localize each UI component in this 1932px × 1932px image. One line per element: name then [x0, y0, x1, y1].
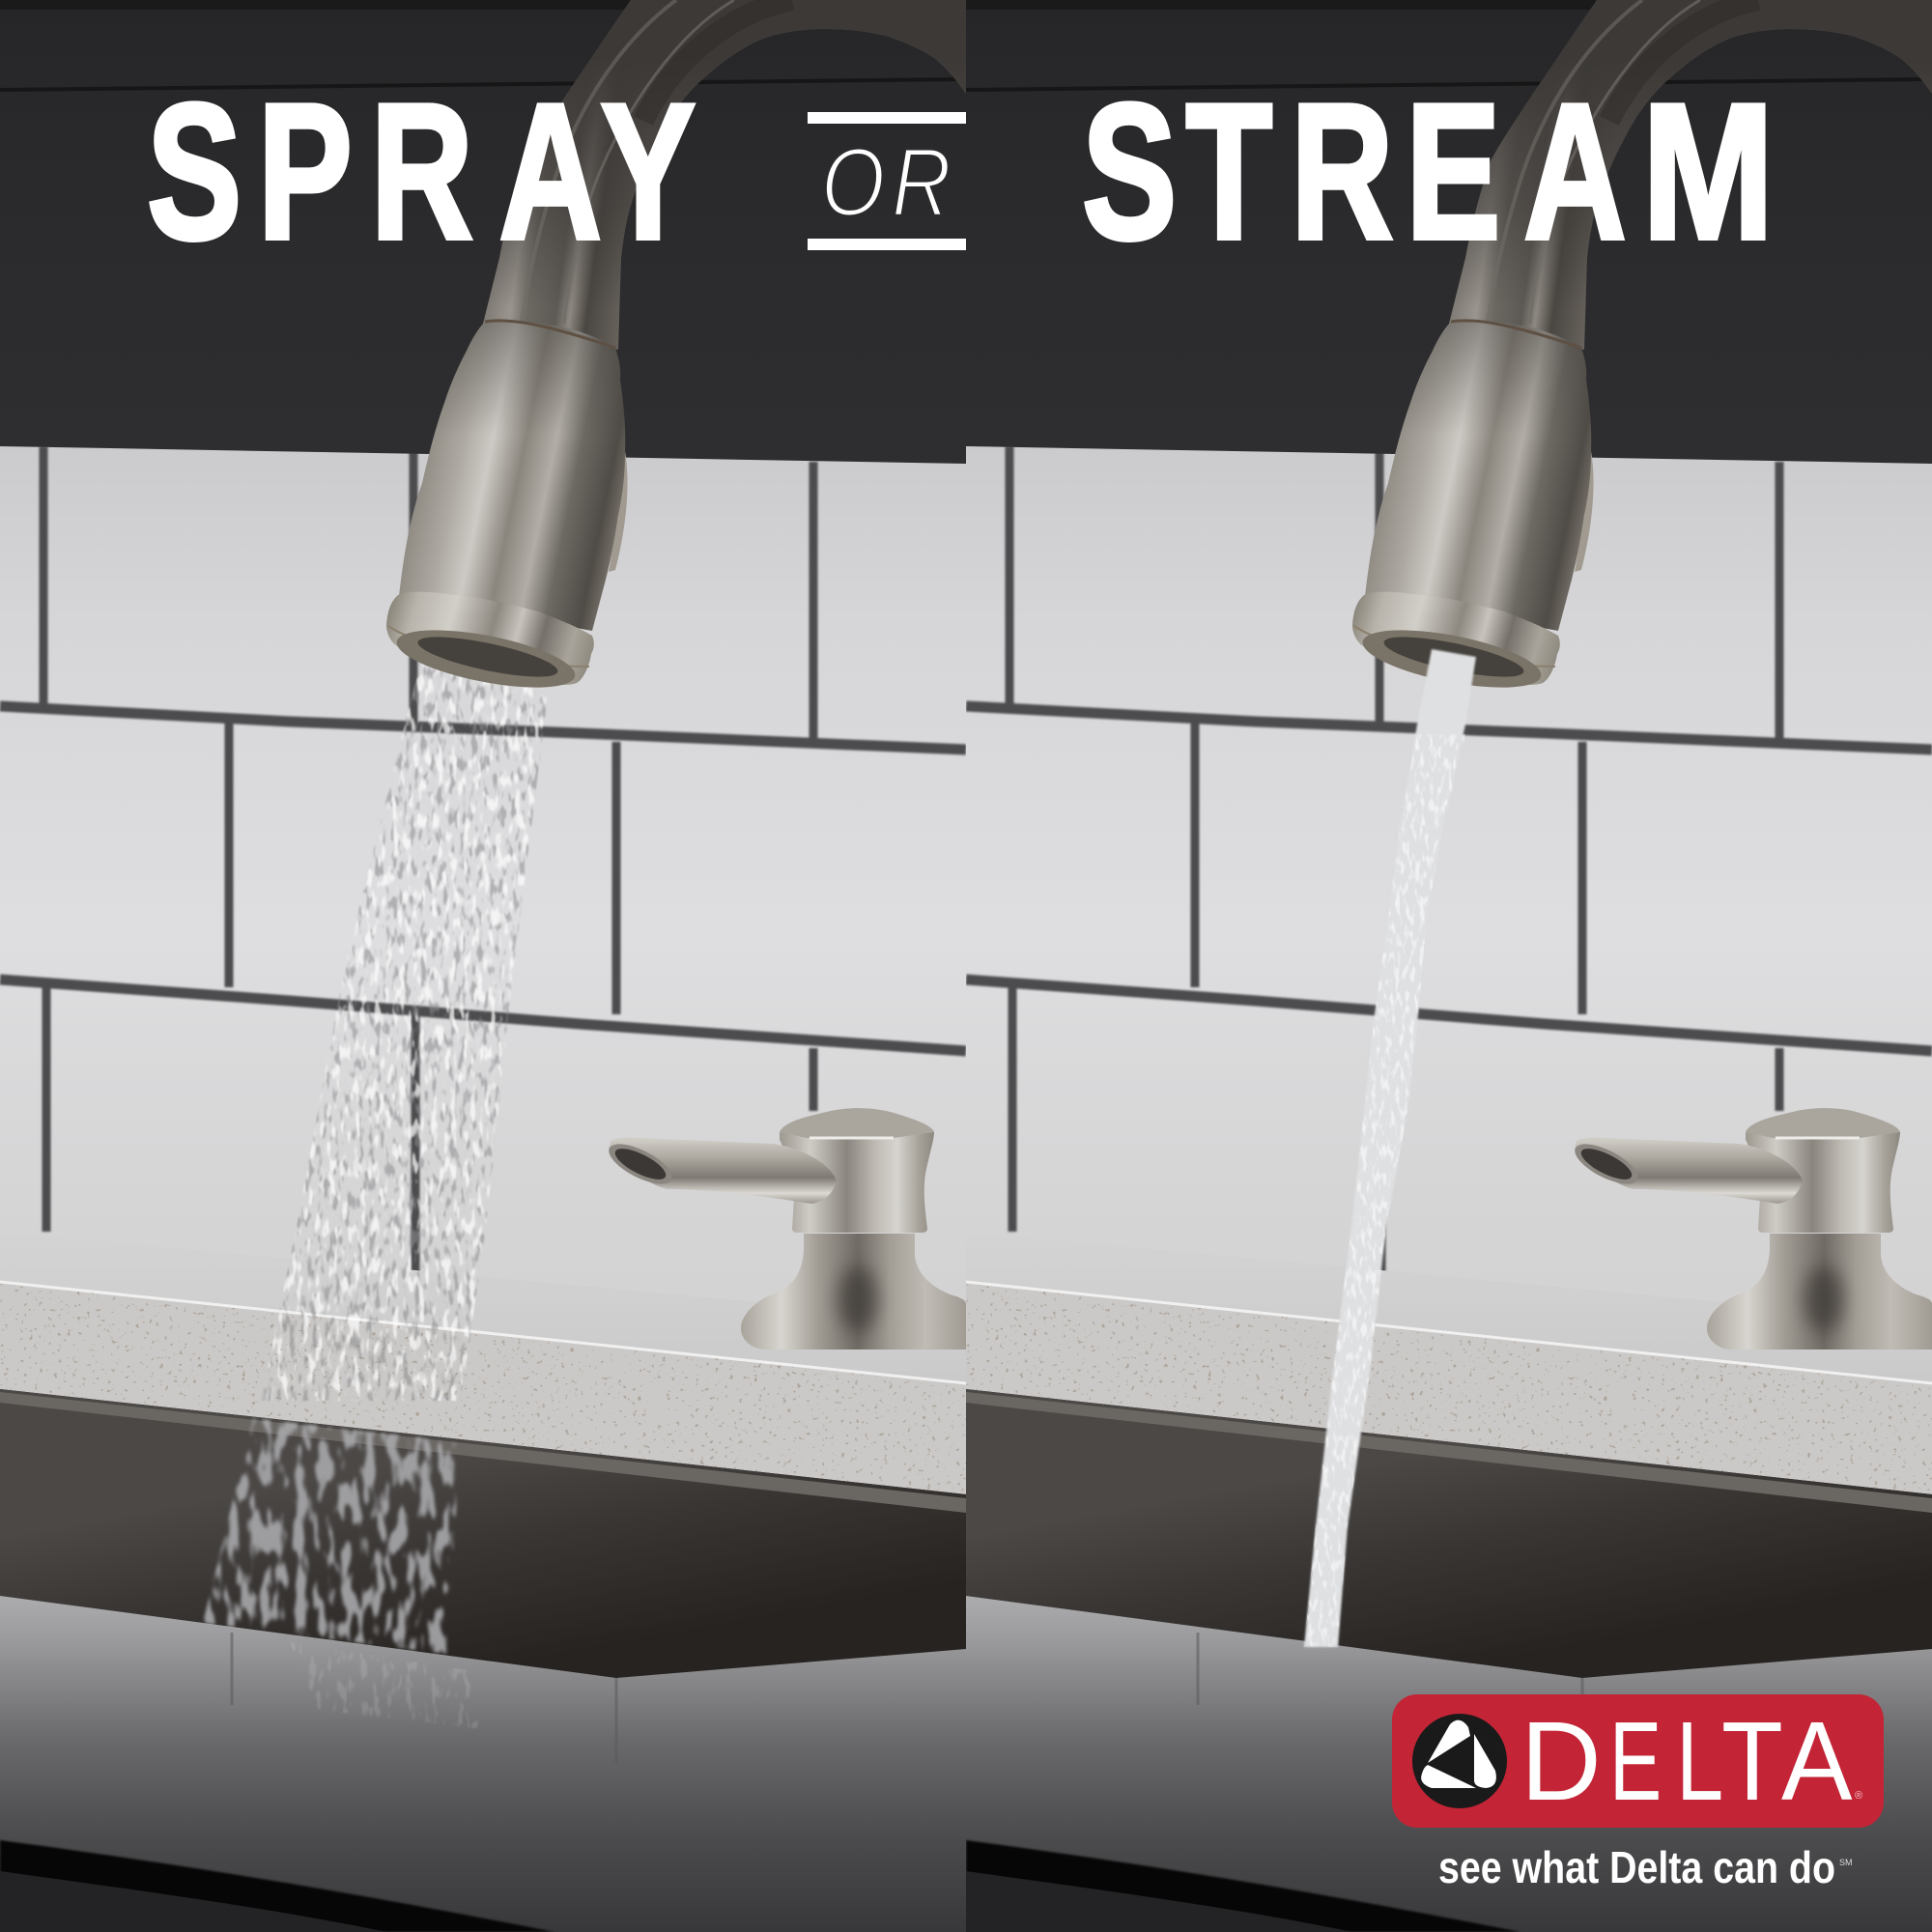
stream of water — [1304, 649, 1476, 1647]
title: SPRAY: SPRAY — [147, 64, 696, 280]
tagline: SM — [1839, 1858, 1853, 1867]
title: STREAM: STREA — [1082, 64, 1626, 280]
backdrop: dark wall, subway tile, counter and sink — [0, 0, 966, 1932]
spray water drops — [203, 642, 553, 1729]
divider: OR — [808, 112, 966, 250]
panel: spray photo — [0, 0, 966, 1932]
wordmark: DELTA: A — [1781, 1698, 1853, 1824]
logo: Delta: ® — [1855, 1790, 1862, 1802]
wordmark: DELTA — [1520, 1698, 1853, 1824]
title: STREAM: M — [1642, 63, 1774, 279]
icon: faucet spray head — [386, 0, 966, 698]
icon: soap dispenser — [1570, 1108, 1932, 1350]
icon: faucet spray head — [1352, 0, 1932, 698]
wordmark: DELTA: T — [1721, 1699, 1783, 1824]
panel: stream photo — [966, 0, 1932, 1932]
wordmark: DELTA: E — [1609, 1699, 1662, 1824]
icon: Delta triangle mark — [1412, 1714, 1507, 1808]
icon: soap dispenser — [604, 1108, 966, 1350]
wordmark: DELTA: D — [1520, 1698, 1602, 1824]
tagline: see what Delta can do — [1438, 1842, 1835, 1892]
backdrop: dark wall, subway tile, counter and sink — [966, 0, 1932, 1932]
logo: Delta — [1392, 1694, 1884, 1828]
wordmark: DELTA: L — [1676, 1698, 1723, 1824]
divider: OR: OR — [821, 128, 951, 237]
